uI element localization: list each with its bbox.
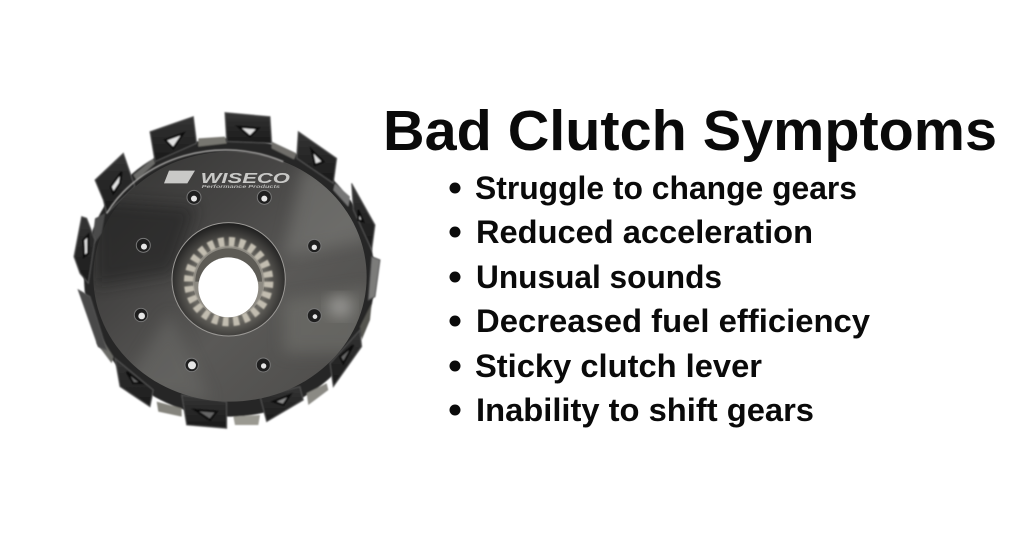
symptoms list [450, 170, 870, 428]
symptom: unusual sounds: Unusual sounds [476, 259, 722, 295]
logo: Performance Products [202, 184, 281, 189]
symptom: struggle to change gears: Struggle to change gears [475, 170, 857, 206]
symptom: reduced acceleration: Reduced acceleration [476, 214, 813, 250]
logo [164, 171, 291, 189]
clutch basket photo [74, 113, 380, 428]
symptom: sticky clutch lever: Sticky clutch lever [475, 348, 762, 384]
tab windows [83, 127, 363, 420]
main disc [93, 150, 370, 402]
symptom: decreased fuel efficiency: Decreased fuel efficiency [476, 303, 870, 339]
basket tabs [74, 113, 380, 428]
center hub [172, 223, 285, 336]
basket wall [84, 137, 375, 425]
center hole [198, 257, 258, 317]
symptom: inability to shift gears: Inability to shift gears [476, 392, 814, 428]
bolt holes [134, 190, 321, 372]
logo: WISECO [201, 171, 291, 187]
title: Bad Clutch Symptoms [383, 99, 997, 163]
